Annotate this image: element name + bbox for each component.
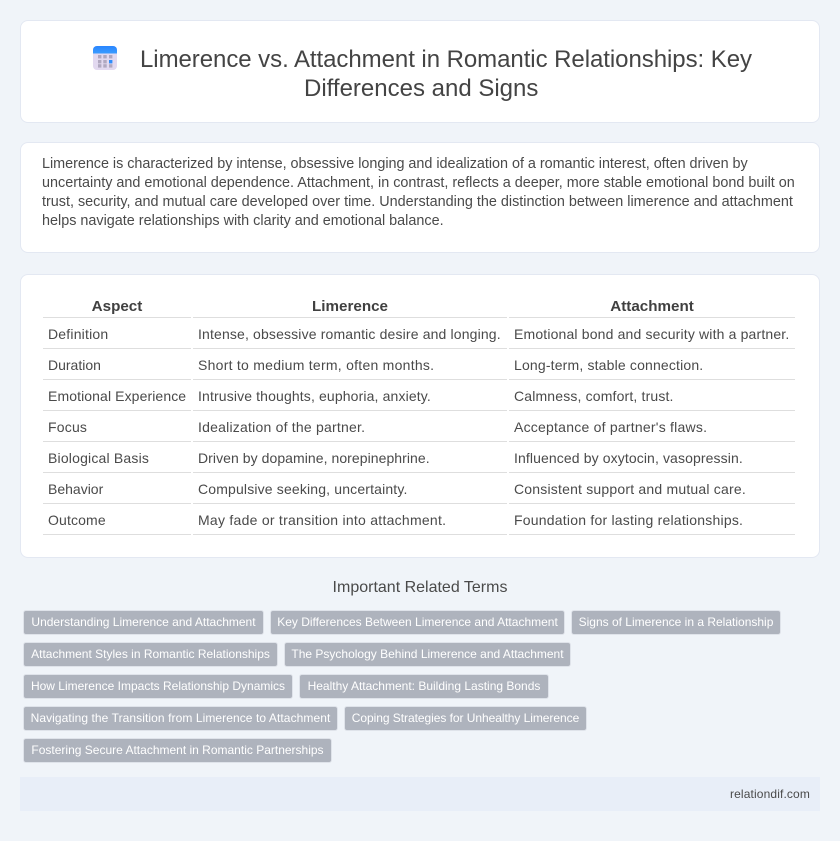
row: biological basis: Driven by dopamine, norepinephrine. [198,450,430,466]
tag: Attachment Styles in Romantic Relationships [31,647,270,661]
row: outcome [48,512,743,528]
row: emotional experience [48,388,674,404]
row: emotional experience: Emotional Experience [48,388,186,404]
comparison table [43,298,795,535]
tag [571,610,781,635]
tag: Healthy Attachment: Building Lasting Bonds [308,679,540,693]
tag: Coping Strategies for Unhealthy Limerence [352,711,579,725]
row: focus: Focus [48,419,87,435]
row: behavior [48,481,746,497]
row: duration: Duration [48,357,101,373]
tag: Fostering Secure Attachment in Romantic Partnerships [31,743,324,757]
tag: The Psychology Behind Limerence and Attachment [291,647,564,661]
row: focus: Idealization of the partner. [198,419,365,435]
panel: comparison table [20,274,820,558]
tag [23,674,293,699]
row: emotional experience: Calmness, comfort, trust. [514,388,674,404]
row: definition [48,326,789,342]
text block: introduction: uncertainty and emotional dependence. Attachment, in contrast, reflects a deeper, more stable emotional bond built on [42,175,795,191]
table header: Aspect [92,298,142,315]
panel: introduction [20,142,820,253]
icon: calendar [93,46,117,70]
heading: important related terms: Important Related Terms [333,579,507,596]
text block: introduction: Limerence is characterized by intense, obsessive longing and idealization of a romantic interest, often driven by [42,156,748,172]
row: outcome: Outcome [48,512,106,528]
row: outcome: Foundation for lasting relationships. [514,512,743,528]
tag: How Limerence Impacts Relationship Dynamics [31,679,285,693]
text block: introduction [42,156,795,229]
row: focus: Acceptance of partner's flaws. [514,419,707,435]
row: emotional experience: Intrusive thoughts, euphoria, anxiety. [198,388,431,404]
table header [92,298,694,315]
row: biological basis: Influenced by oxytocin, vasopressin. [514,450,743,466]
row: definition: Emotional bond and security with a partner. [514,326,789,342]
tag [284,642,571,667]
row: definition: Definition [48,326,108,342]
title: Limerence vs. Attachment in Romantic Relationships: Key [140,46,752,73]
footer source text: relationdif.com [730,787,810,801]
row: definition: Intense, obsessive romantic desire and longing. [198,326,501,342]
text block: introduction: helps navigate relationships with clarity and emotional balance. [42,213,444,229]
row: behavior: Consistent support and mutual care. [514,481,746,497]
table header: Attachment [610,298,694,315]
row: biological basis: Biological Basis [48,450,149,466]
tag [344,706,587,731]
row: duration: Long-term, stable connection. [514,357,703,373]
tag [23,738,332,763]
tag: Understanding Limerence and Attachment [31,615,256,629]
tag: Navigating the Transition from Limerence to Attachment [31,711,330,725]
footer [20,777,820,811]
row: outcome: May fade or transition into attachment. [198,512,446,528]
tag [270,610,565,635]
tag group: related terms [23,610,781,763]
tag: Signs of Limerence in a Relationship [579,615,773,629]
row: duration [48,357,703,373]
panel: header [20,20,820,123]
row: behavior: Compulsive seeking, uncertainty. [198,481,408,497]
table header: Limerence [312,298,388,315]
tag: Key Differences Between Limerence and Attachment [277,615,558,629]
tag [23,610,264,635]
tag [299,674,549,699]
row: behavior: Behavior [48,481,103,497]
tag [23,642,278,667]
row: duration: Short to medium term, often months. [198,357,434,373]
row: biological basis [48,450,743,466]
row: focus [48,419,707,435]
text block: introduction: trust, security, and mutual care developed over time. Understanding the distinction between limerence and attachment [42,194,793,210]
tag [23,706,338,731]
title [140,46,752,102]
title: Differences and Signs [304,75,538,102]
